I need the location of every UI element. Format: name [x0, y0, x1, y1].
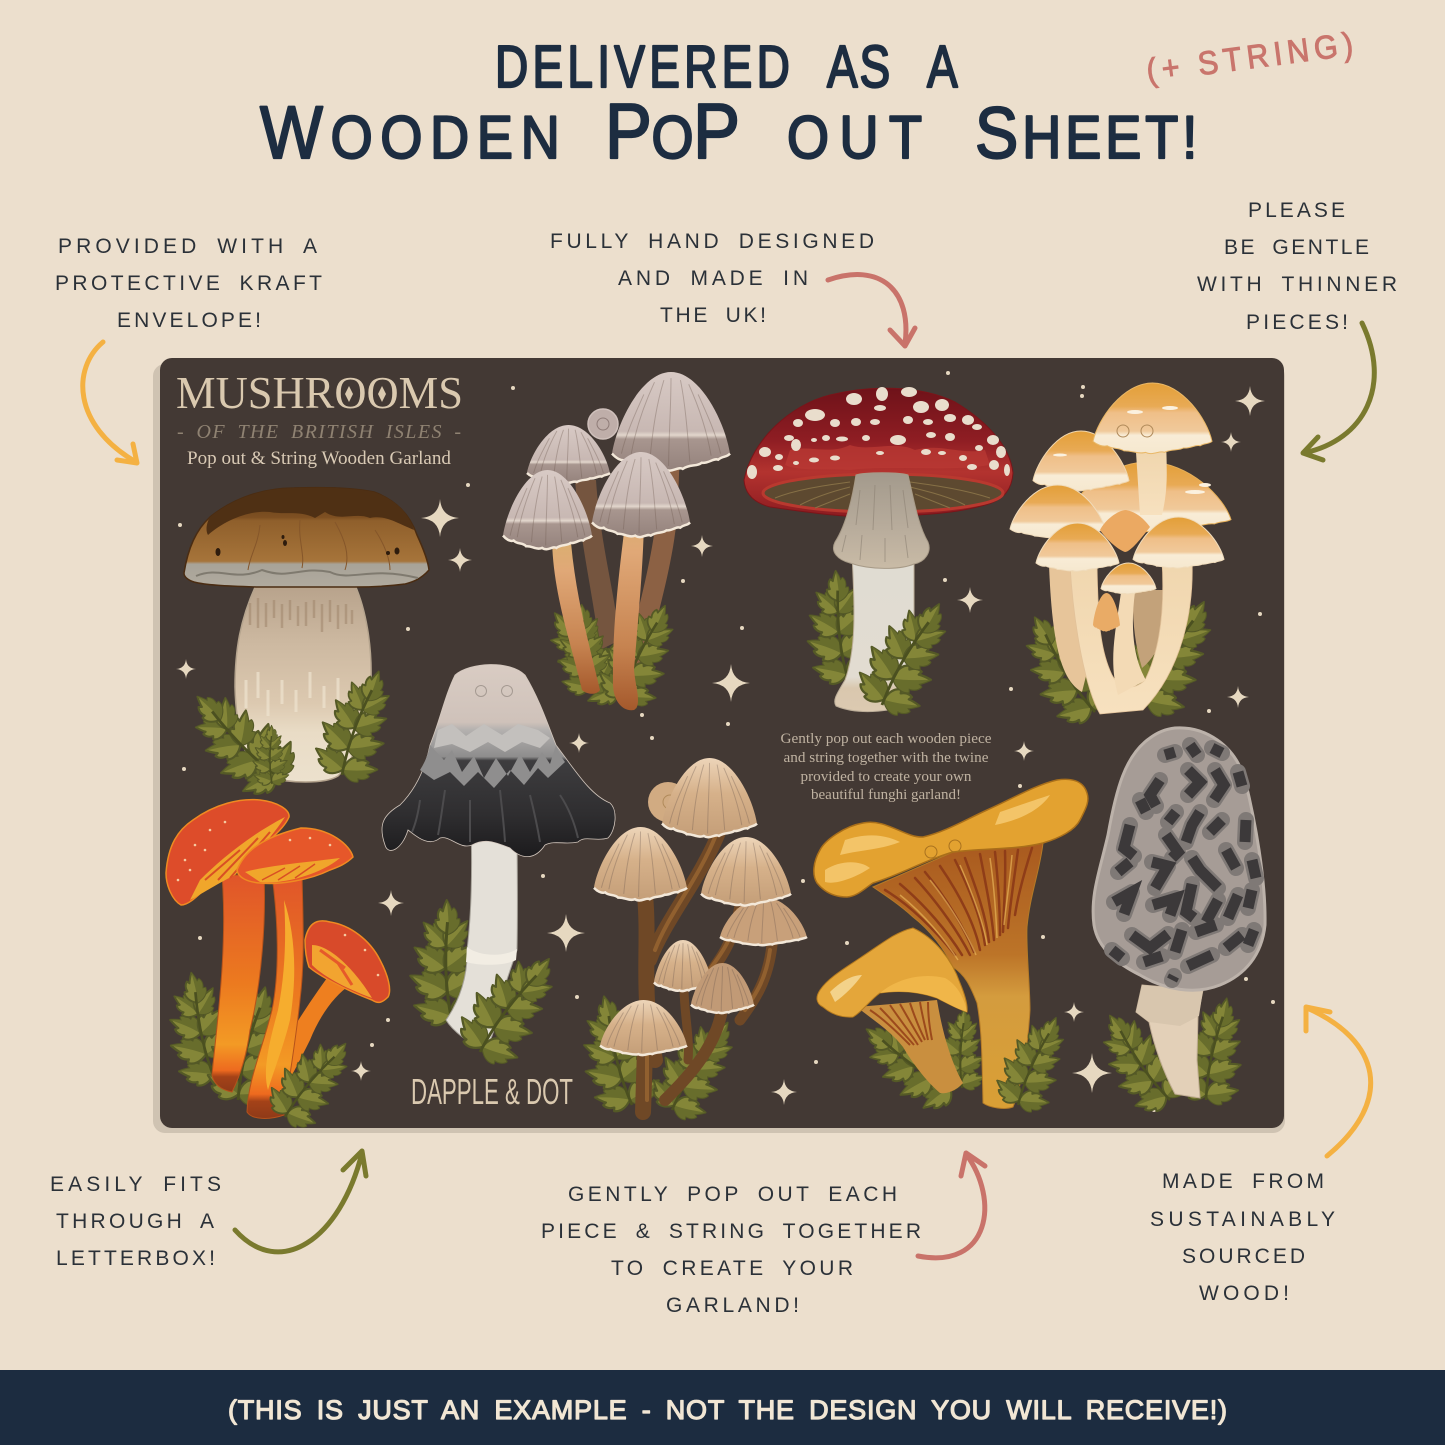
- arrow: olive bottom left: [235, 1151, 366, 1252]
- tag loop: [588, 409, 618, 439]
- callout: kraft envelope: ENVELOPE!: [117, 309, 261, 332]
- arrow: pink bottom: [918, 1153, 985, 1258]
- callout: be gentle: BE GENTLE: [1224, 236, 1369, 259]
- caps: [1093, 593, 1120, 632]
- footer band: [0, 1370, 1445, 1445]
- title: SHEET!: [975, 93, 1197, 174]
- title: OUT: [787, 104, 922, 172]
- mushroom: orange waxcap: [152, 800, 390, 1141]
- callout: letterbox: THROUGH A: [56, 1210, 214, 1233]
- instructions text: Gently pop out each wooden piece: [780, 731, 992, 747]
- callout: sustainable wood: SUSTAINABLY: [1150, 1208, 1335, 1231]
- mushroom: honey cluster: [1000, 383, 1238, 740]
- arrow: pink top: [828, 275, 915, 346]
- callout: pop out and string: GENTLY POP OUT EACH: [568, 1183, 897, 1206]
- mushroom: porcini: [167, 488, 429, 814]
- mushroom: chanterelle: [814, 779, 1088, 1127]
- title: WOODEN: [260, 91, 560, 174]
- instructions text: beautiful funghi garland!: [811, 787, 961, 803]
- sheet heading: mushrooms of the british isles: [176, 367, 463, 469]
- title: AS: [827, 35, 890, 100]
- callout: be gentle: PLEASE: [1248, 199, 1345, 222]
- wooden sheet panel: [152, 358, 1285, 1141]
- footer disclaimer: (THIS IS JUST AN EXAMPLE - NOT THE DESIGN YOU WILL RECEIVE!): [228, 1395, 1227, 1425]
- title: [260, 35, 1197, 175]
- arrow: olive top right: [1303, 323, 1374, 460]
- callout: be gentle: PIECES!: [1246, 311, 1348, 334]
- sheet heading: mushrooms of the british isles: MUSHROOMS: [176, 367, 463, 418]
- stems: [1049, 565, 1090, 692]
- note: plus string: (+ STRING): [1144, 25, 1355, 89]
- sheet heading: mushrooms of the british isles: - OF THE BRITISH ISLES -: [177, 421, 461, 443]
- sheet heading: mushrooms of the british isles: Pop out & String Wooden Garland: [187, 448, 451, 469]
- callout: kraft envelope: PROTECTIVE KRAFT: [55, 272, 322, 295]
- title: A: [927, 35, 958, 100]
- callout: hand designed: FULLY HAND DESIGNED: [550, 230, 874, 253]
- mushroom: fly agaric: [744, 387, 1013, 729]
- callout: sustainable wood: MADE FROM: [1162, 1170, 1324, 1193]
- brand: dapple and dot: DAPPLE & DOT: [411, 1071, 573, 1112]
- title: POP: [605, 88, 740, 175]
- callout: kraft envelope: [55, 235, 322, 332]
- callout: sustainable wood: [1150, 1170, 1335, 1305]
- arrow: orange right: [1306, 1007, 1371, 1156]
- callout: be gentle: WITH THINNER: [1197, 273, 1397, 296]
- title: DELIVERED: [495, 35, 790, 100]
- mushroom: shaggy inkcap: [382, 664, 615, 1080]
- caps: [648, 782, 688, 822]
- callout: hand designed: AND MADE IN: [618, 267, 808, 290]
- callout: letterbox: EASILY FITS: [50, 1173, 221, 1196]
- back stems: [622, 450, 680, 690]
- callout: sustainable wood: WOOD!: [1199, 1282, 1289, 1305]
- callout: hand designed: THE UK!: [660, 304, 766, 327]
- mushroom: bonnet cluster: [503, 372, 730, 722]
- instructions text: provided to create your own: [800, 769, 972, 785]
- callout: letterbox: [50, 1173, 221, 1270]
- instructions text: [780, 731, 992, 803]
- callout: pop out and string: TO CREATE YOUR: [611, 1257, 853, 1280]
- mushroom: morel: [1078, 728, 1265, 1127]
- callout: letterbox: LETTERBOX!: [56, 1247, 215, 1270]
- callout: be gentle: [1197, 199, 1397, 334]
- stars and dots: [176, 371, 1275, 1112]
- callout: pop out and string: PIECE & STRING TOGETHER: [541, 1220, 921, 1243]
- callout: pop out and string: [541, 1183, 921, 1317]
- callout: hand designed: [550, 230, 874, 327]
- instructions text: and string together with the twine: [784, 750, 989, 766]
- callout: pop out and string: GARLAND!: [666, 1294, 799, 1317]
- stems: [643, 830, 772, 1112]
- callout: sustainable wood: SOURCED: [1182, 1245, 1305, 1268]
- callout: kraft envelope: PROVIDED WITH A: [58, 235, 317, 258]
- arrow: orange top left: [83, 342, 137, 463]
- mushroom: tan bonnet cluster: [564, 758, 807, 1133]
- caps: [612, 372, 730, 471]
